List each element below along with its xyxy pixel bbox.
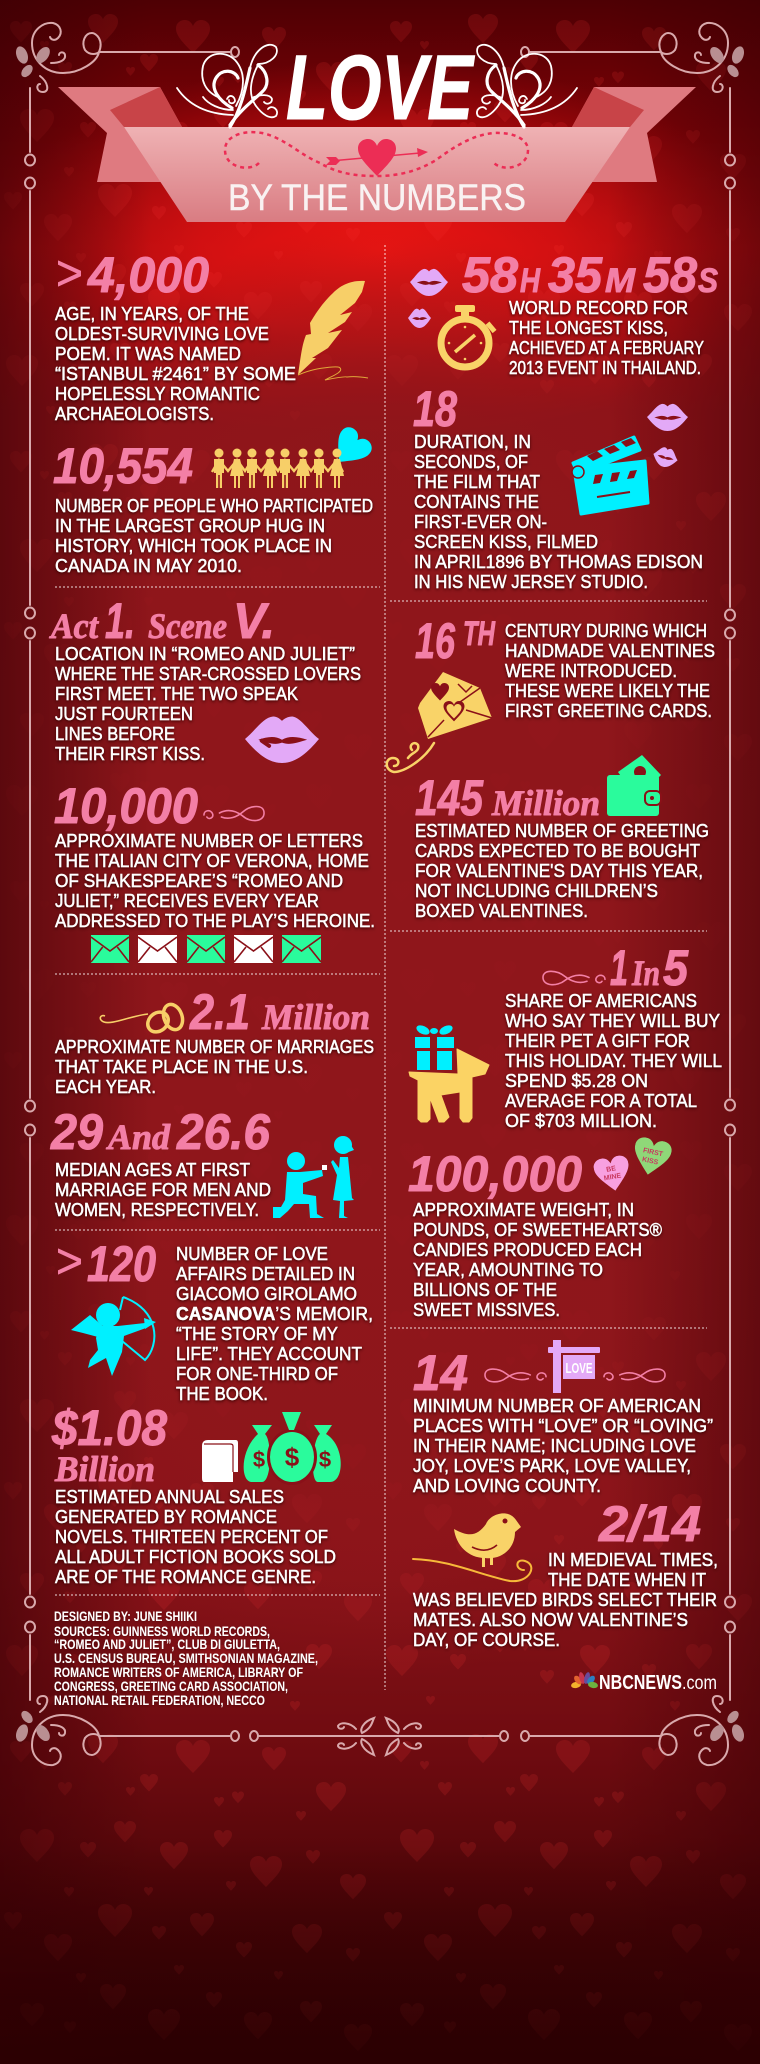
icon: green candy heart: KISS bbox=[641, 1156, 659, 1167]
credits and sources: “ROMEO AND JULIET”, CLUB DI GIULETTA, bbox=[54, 1636, 280, 1652]
description: LINES BEFORE bbox=[55, 724, 175, 744]
panel: romance novels bbox=[51, 1400, 341, 1587]
description: HISTORY, WHICH TOOK PLACE IN bbox=[55, 536, 332, 556]
icon: wallet bbox=[607, 755, 661, 816]
credits and sources: ROMANCE WRITERS OF AMERICA, LIBRARY OF bbox=[54, 1664, 303, 1680]
flourish bbox=[543, 971, 605, 985]
description: FIRST-EVER ON- bbox=[414, 512, 547, 532]
description: SHARE OF AMERICANS bbox=[505, 991, 697, 1011]
description: BOXED VALENTINES. bbox=[415, 901, 588, 921]
panel: marriages per year bbox=[55, 984, 374, 1097]
stat: 58h 35m 58s: S bbox=[698, 262, 718, 300]
icon: feather quill bbox=[298, 281, 368, 380]
description: LOCATION IN “ROMEO AND JULIET” bbox=[55, 644, 355, 664]
icon: green candy heart bbox=[630, 1136, 673, 1178]
description: AGE, IN YEARS, OF THE bbox=[55, 304, 249, 324]
description: THE LONGEST KISS, bbox=[509, 318, 668, 338]
panel: Casanova bbox=[56, 1233, 373, 1404]
stat: 58h 35m 58s: H bbox=[520, 262, 541, 300]
flourish right bbox=[604, 1369, 665, 1382]
title banner bbox=[58, 37, 696, 222]
description: JOY, LOVE’S PARK, LOVE VALLEY, bbox=[413, 1456, 691, 1476]
credits and sources: NATIONAL RETAIL FEDERATION, NECCO bbox=[54, 1692, 265, 1708]
description: THEIR PET A GIFT FOR bbox=[505, 1031, 690, 1051]
description: JUST FOURTEEN bbox=[55, 704, 193, 724]
description bbox=[55, 644, 361, 764]
stat: 1 in 5 bbox=[610, 940, 689, 996]
stat: 10,554: 10,554 bbox=[53, 438, 193, 494]
panel: greeting cards bbox=[415, 755, 709, 921]
stat: $1.08 Billion: $1.08 bbox=[51, 1400, 167, 1456]
stat: 2.1 Million bbox=[189, 984, 370, 1040]
stat: >120: > bbox=[56, 1233, 83, 1289]
icon: money bags: $ bbox=[285, 1442, 300, 1472]
credits and sources: CONGRESS, GREETING CARD ASSOCIATION, bbox=[54, 1678, 288, 1694]
description: DAY, OF COURSE. bbox=[413, 1630, 560, 1650]
description: THE ITALIAN CITY OF VERONA, HOME bbox=[55, 851, 369, 871]
description bbox=[505, 621, 715, 721]
icon: book bbox=[202, 1440, 238, 1482]
flourish: left and right of title bbox=[177, 45, 577, 127]
icon: row of envelopes bbox=[91, 935, 321, 963]
description: FIRST MEET. THE TWO SPEAK bbox=[55, 684, 298, 704]
description: WORLD RECORD FOR bbox=[509, 298, 688, 318]
description: ADDRESSED TO THE PLAY’S HEROINE. bbox=[55, 911, 375, 931]
stat: 1 in 5: 1 bbox=[610, 940, 628, 996]
description: WERE INTRODUCED. bbox=[505, 661, 677, 681]
stat: >4,000: > bbox=[56, 245, 83, 301]
description: JULIET,” RECEIVES EVERY YEAR bbox=[55, 891, 319, 911]
panel: medieval birds bbox=[413, 1496, 718, 1650]
description: SCREEN KISS, FILMED bbox=[414, 532, 598, 552]
description bbox=[176, 1244, 373, 1404]
description: ARCHAEOLOGISTS. bbox=[55, 404, 214, 424]
ribbon front bbox=[124, 127, 630, 222]
description: NOVELS. THIRTEEN PERCENT OF bbox=[55, 1527, 328, 1547]
description: ALL ADULT FICTION BOOKS SOLD bbox=[55, 1547, 336, 1567]
description: IN APRIL1896 BY THOMAS EDISON bbox=[414, 552, 703, 572]
icon: money bags: $ bbox=[319, 1447, 331, 1472]
description: SECONDS, OF bbox=[414, 452, 528, 472]
icon: marriage proposal bbox=[273, 1136, 354, 1218]
description: CASANOVA’S MEMOIR, bbox=[176, 1304, 373, 1324]
description: THE FILM THAT bbox=[414, 472, 540, 492]
credits and sources bbox=[54, 1608, 318, 1708]
description: WAS BELIEVED BIRDS SELECT THEIR bbox=[413, 1590, 717, 1610]
icon: green candy heart: FIRST bbox=[642, 1147, 664, 1158]
description: APPROXIMATE WEIGHT, IN bbox=[413, 1200, 634, 1220]
stat: 2/14: 2/14 bbox=[598, 1496, 701, 1552]
description: THE BOOK. bbox=[176, 1384, 268, 1404]
wordmark: NBCNEWS bbox=[599, 1672, 682, 1694]
stat: $1.08 Billion bbox=[51, 1400, 167, 1489]
panel: oldest love poem bbox=[55, 245, 368, 424]
stat: 29 And 26.6: 29 bbox=[50, 1104, 103, 1160]
description: POUNDS, OF SWEETHEARTS® bbox=[413, 1220, 662, 1240]
icon: bird on branch bbox=[413, 1513, 531, 1581]
ribbon tails bbox=[58, 87, 696, 182]
icon: love letter envelope bbox=[418, 672, 492, 739]
description bbox=[413, 1550, 718, 1650]
stat: 1 in 5: 5 bbox=[663, 940, 689, 996]
icon: cupid bbox=[71, 1297, 156, 1376]
description: OF SHAKESPEARE’S “ROMEO AND bbox=[55, 871, 343, 891]
description: LIFE”. THEY ACCOUNT bbox=[176, 1344, 362, 1364]
stat: 2.1 Million: Million bbox=[261, 997, 370, 1037]
stat: 145 Million: 145 bbox=[415, 770, 484, 826]
icon: money bags: $ bbox=[253, 1447, 265, 1472]
description bbox=[55, 1160, 271, 1220]
logo: NBC News: .com bbox=[682, 1673, 717, 1694]
icon: film clapperboard bbox=[572, 437, 648, 514]
description: BILLIONS OF THE bbox=[413, 1280, 557, 1300]
description bbox=[55, 831, 375, 931]
icon: peacock bbox=[571, 1672, 598, 1689]
icon: wedding rings bbox=[100, 1002, 186, 1036]
description: OF $703 MILLION. bbox=[505, 1111, 657, 1131]
icon: lips bbox=[647, 404, 688, 470]
panel: romeo and juliet scene bbox=[49, 593, 361, 764]
description: MEDIAN AGES AT FIRST bbox=[55, 1160, 250, 1180]
description: MINIMUM NUMBER OF AMERICAN bbox=[413, 1396, 701, 1416]
icon: love sign: LOVE bbox=[566, 1360, 592, 1377]
stat: >120: 120 bbox=[87, 1236, 156, 1292]
description: SPEND $5.28 ON bbox=[505, 1071, 648, 1091]
panel: pet gifts bbox=[409, 940, 722, 1131]
stat: Act 1. Scene V. bbox=[49, 593, 275, 649]
description bbox=[55, 496, 373, 576]
description: OLDEST-SURVIVING LOVE bbox=[55, 324, 269, 344]
logo: NBC News bbox=[571, 1672, 717, 1694]
stat: 58h 35m 58s: 58 bbox=[643, 247, 697, 303]
panel: handmade valentines bbox=[387, 613, 715, 772]
description bbox=[415, 821, 709, 921]
description: DURATION, IN bbox=[414, 432, 531, 452]
description: EACH YEAR. bbox=[55, 1077, 156, 1097]
description: IN THE LARGEST GROUP HUG IN bbox=[55, 516, 325, 536]
stat: 58h 35m 58s: M bbox=[605, 262, 636, 300]
stat: 145 Million: Million bbox=[491, 783, 600, 823]
stat: 58h 35m 58s bbox=[462, 247, 718, 303]
stat: 2.1 Million: 2.1 bbox=[189, 984, 250, 1040]
description: IN MEDIEVAL TIMES, bbox=[548, 1550, 718, 1570]
description: ESTIMATED NUMBER OF GREETING bbox=[415, 821, 709, 841]
icon: heart and arrow infinity bbox=[225, 132, 528, 176]
panel: group hug bbox=[53, 424, 375, 576]
description: ESTIMATED ANNUAL SALES bbox=[55, 1487, 284, 1507]
icon: lips bbox=[245, 716, 319, 763]
description: CANDIES PRODUCED EACH bbox=[413, 1240, 642, 1260]
description: MARRIAGE FOR MEN AND bbox=[55, 1180, 271, 1200]
description: CENTURY DURING WHICH bbox=[505, 621, 707, 641]
credits and sources: DESIGNED BY: JUNE SHIIKI bbox=[54, 1608, 197, 1624]
description: HANDMADE VALENTINES bbox=[505, 641, 715, 661]
stat: Act 1. Scene V.: Scene bbox=[148, 606, 227, 646]
description: NOT INCLUDING CHILDREN’S bbox=[415, 881, 658, 901]
description: WOMEN, RESPECTIVELY. bbox=[55, 1200, 259, 1220]
description: THAT TAKE PLACE IN THE U.S. bbox=[55, 1057, 308, 1077]
icon: heart behind people bbox=[325, 424, 375, 474]
description: THIS HOLIDAY. THEY WILL bbox=[505, 1051, 722, 1071]
stat: 58h 35m 58s: 35 bbox=[548, 247, 603, 303]
description: CARDS EXPECTED TO BE BOUGHT bbox=[415, 841, 700, 861]
stat: 16th bbox=[415, 613, 496, 669]
description bbox=[509, 298, 704, 378]
description: GENERATED BY ROMANCE bbox=[55, 1507, 277, 1527]
description: AVERAGE FOR A TOTAL bbox=[505, 1091, 697, 1111]
icon: lips bbox=[408, 269, 448, 328]
description: FOR VALENTINE'S DAY THIS YEAR, bbox=[415, 861, 703, 881]
icon: pink candy heart bbox=[592, 1154, 633, 1194]
description: AFFAIRS DETAILED IN bbox=[176, 1264, 355, 1284]
panel: first on-screen kiss bbox=[413, 381, 703, 592]
description: WHO SAY THEY WILL BUY bbox=[505, 1011, 720, 1031]
icon: chain of people bbox=[212, 448, 344, 488]
stat: 18: 18 bbox=[413, 381, 457, 437]
description: POEM. IT WAS NAMED bbox=[55, 344, 241, 364]
description: AND LOVING COUNTY. bbox=[413, 1476, 601, 1496]
flourish: swirl bbox=[387, 743, 434, 772]
description bbox=[55, 304, 296, 424]
description: “ISTANBUL #2461” BY SOME bbox=[55, 364, 296, 384]
icon: money bags bbox=[244, 1412, 341, 1485]
stat: >120 bbox=[56, 1233, 156, 1292]
description: HOPELESSLY ROMANTIC bbox=[55, 384, 260, 404]
icon: pink candy heart: MINE bbox=[603, 1172, 622, 1182]
description bbox=[505, 991, 722, 1131]
stat: 1 in 5: In bbox=[631, 953, 660, 993]
description: WHERE THE STAR-CROSSED LOVERS bbox=[55, 664, 361, 684]
description: FIRST GREETING CARDS. bbox=[505, 701, 712, 721]
description: YEAR, AMOUNTING TO bbox=[413, 1260, 603, 1280]
description: 2013 EVENT IN THAILAND. bbox=[509, 358, 701, 378]
stat: 14: 14 bbox=[413, 1345, 468, 1401]
divider lines bbox=[55, 245, 707, 1690]
stat: Act 1. Scene V.: 1. bbox=[105, 593, 135, 649]
description bbox=[414, 432, 703, 592]
description: CONTAINS THE bbox=[414, 492, 539, 512]
description: THEIR FIRST KISS. bbox=[55, 744, 205, 764]
subtitle: BY THE NUMBERS bbox=[228, 177, 526, 218]
description: ACHIEVED AT A FEBRUARY bbox=[509, 338, 704, 358]
stat: 29 And 26.6: And bbox=[106, 1117, 171, 1157]
flourish bbox=[204, 806, 264, 821]
description: NUMBER OF PEOPLE WHO PARTICIPATED bbox=[55, 496, 373, 516]
description: THE DATE WHEN IT bbox=[548, 1570, 706, 1590]
icon: stopwatch bbox=[441, 305, 497, 367]
description bbox=[413, 1396, 713, 1496]
stat: >4,000: 4,000 bbox=[87, 247, 209, 303]
stat: 145 Million bbox=[415, 770, 600, 826]
icon: dog carrying gift bbox=[409, 1023, 489, 1122]
icon: love sign bbox=[548, 1340, 600, 1393]
description: IN THEIR NAME; INCLUDING LOVE bbox=[413, 1436, 696, 1456]
description: MATES. ALSO NOW VALENTINE’S bbox=[413, 1610, 688, 1630]
description: THESE WERE LIKELY THE bbox=[505, 681, 710, 701]
icon: pink candy heart: BE bbox=[606, 1165, 617, 1174]
stat: $1.08 Billion: Billion bbox=[54, 1449, 155, 1489]
description bbox=[55, 1487, 336, 1587]
panel: median ages bbox=[50, 1104, 354, 1220]
panel: letters to Juliet bbox=[54, 778, 375, 963]
description bbox=[413, 1200, 662, 1320]
description: APPROXIMATE NUMBER OF LETTERS bbox=[55, 831, 363, 851]
panel: places named love bbox=[413, 1340, 713, 1496]
description: NUMBER OF LOVE bbox=[176, 1244, 328, 1264]
stat: 29 And 26.6: 26.6 bbox=[176, 1104, 271, 1160]
description: ARE OF THE ROMANCE GENRE. bbox=[55, 1567, 316, 1587]
description: APPROXIMATE NUMBER OF MARRIAGES bbox=[55, 1037, 374, 1057]
stat: 16th: 16 bbox=[415, 613, 456, 669]
description: IN HIS NEW JERSEY STUDIO. bbox=[414, 572, 648, 592]
stat: 58h 35m 58s: 58 bbox=[462, 247, 518, 303]
description bbox=[55, 1037, 374, 1097]
credits and sources: U.S. CENSUS BUREAU, SMITHSONIAN MAGAZINE, bbox=[54, 1650, 318, 1666]
stat: 16th: TH bbox=[463, 615, 496, 653]
panel: longest kiss bbox=[408, 247, 718, 378]
credits and sources: SOURCES: GUINNESS WORLD RECORDS, bbox=[54, 1623, 270, 1639]
description: “THE STORY OF MY bbox=[176, 1324, 338, 1344]
title: LOVE: LOVE bbox=[286, 37, 475, 139]
stat: Act 1. Scene V.: V. bbox=[233, 593, 275, 649]
flourish left bbox=[485, 1369, 546, 1382]
description: FOR ONE-THIRD OF bbox=[176, 1364, 338, 1384]
panel: sweethearts candy bbox=[408, 1136, 673, 1320]
stat: 10,000: 10,000 bbox=[54, 778, 198, 834]
description: SWEET MISSIVES. bbox=[413, 1300, 560, 1320]
description: PLACES WITH “LOVE” OR “LOVING” bbox=[413, 1416, 713, 1436]
stat: Act 1. Scene V.: Act bbox=[49, 606, 99, 646]
description: CANADA IN MAY 2010. bbox=[55, 556, 242, 576]
description: GIACOMO GIROLAMO bbox=[176, 1284, 357, 1304]
stat: 100,000: 100,000 bbox=[408, 1146, 582, 1202]
stat: 29 And 26.6 bbox=[50, 1104, 271, 1160]
